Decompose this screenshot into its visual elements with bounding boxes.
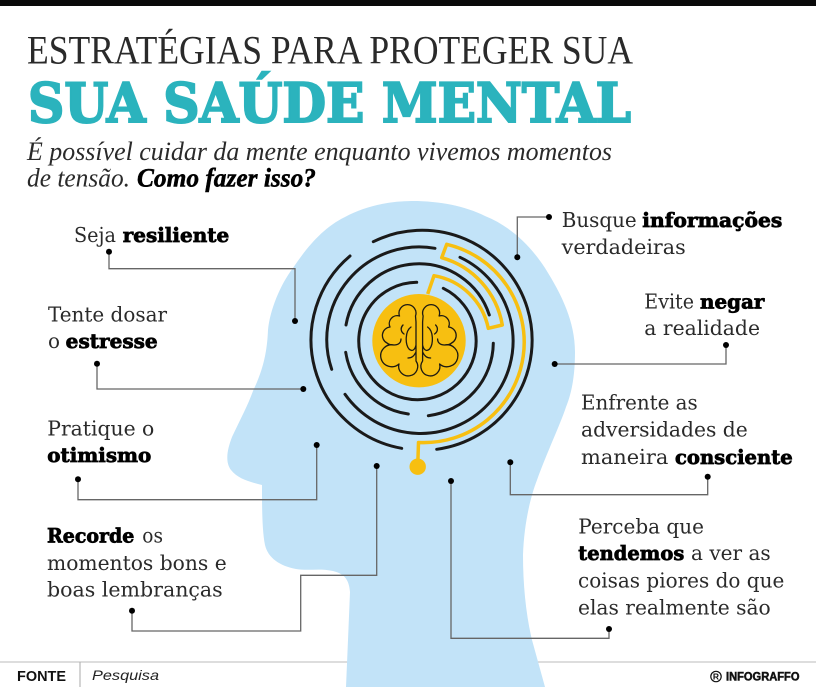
logo: Infograffo: INFOGRAFFO bbox=[726, 672, 800, 684]
leader: Evite negar bbox=[552, 342, 729, 367]
title: SUA SAÚDE MENTAL bbox=[28, 71, 631, 135]
label: Seja resiliente: resiliente bbox=[123, 223, 229, 247]
yellow maze path bbox=[410, 244, 524, 475]
label: Seja resiliente: Seja bbox=[74, 223, 116, 247]
title bbox=[27, 28, 633, 135]
label: Perceba que tendemos bbox=[578, 514, 784, 619]
label: Evite negar: a realidade bbox=[644, 316, 760, 340]
maze rings bbox=[311, 230, 532, 449]
label: Tente dosar o estresse: o bbox=[48, 329, 60, 353]
source: FONTE bbox=[17, 669, 66, 685]
leader: Tente dosar bbox=[94, 361, 306, 392]
head silhouette bbox=[227, 201, 575, 687]
label: Tente dosar o estresse bbox=[48, 303, 167, 353]
leader: Seja resiliente bbox=[106, 249, 298, 324]
leader: Busque informações bbox=[514, 214, 552, 260]
label: Pratique o otimismo: otimismo bbox=[47, 443, 151, 467]
footer rule bbox=[0, 662, 816, 687]
label: Perceba que tendemos: a ver as bbox=[691, 541, 771, 565]
label: Evite negar bbox=[644, 289, 765, 340]
subtitle: É possível cuidar da mente enquanto vivemos momentos bbox=[26, 137, 612, 166]
source: Pesquisa bbox=[92, 667, 159, 683]
label: Tente dosar o estresse: Tente dosar bbox=[48, 303, 167, 327]
subtitle bbox=[26, 137, 612, 193]
icon: brain in yellow circle bbox=[372, 294, 466, 387]
label: Recorde os momentos: Recorde bbox=[47, 523, 134, 547]
label: Tente dosar o estresse: estresse bbox=[66, 329, 158, 353]
logo: Infograffo: R bbox=[713, 672, 719, 682]
leader: Perceba que tendemos bbox=[448, 478, 612, 638]
label: Recorde os momentos: boas lembranças bbox=[47, 578, 223, 602]
label: Recorde os momentos: os bbox=[142, 523, 163, 547]
label: Perceba que tendemos: coisas piores do que bbox=[578, 568, 784, 592]
label: Enfrente as adversidades: consciente bbox=[675, 445, 793, 469]
label: Enfrente as adversidades: adversidades de bbox=[581, 418, 748, 442]
label: Enfrente as adversidades bbox=[581, 390, 793, 469]
label: Enfrente as adversidades: Enfrente as bbox=[581, 390, 698, 414]
label: Pratique o otimismo: Pratique o bbox=[47, 417, 154, 441]
label: Busque informações bbox=[561, 208, 782, 259]
label: Enfrente as adversidades: maneira bbox=[581, 445, 668, 469]
subtitle: de tensão. bbox=[27, 164, 130, 193]
label: Perceba que tendemos: elas realmente são bbox=[578, 595, 771, 619]
label: Busque informações: informações bbox=[642, 208, 782, 232]
subtitle: Como fazer isso? bbox=[137, 164, 316, 193]
label: Recorde os momentos bbox=[47, 523, 227, 602]
label: Recorde os momentos: momentos bons e bbox=[47, 551, 227, 575]
label: Pratique o otimismo bbox=[47, 417, 154, 467]
label: Perceba que tendemos: tendemos bbox=[578, 541, 684, 565]
label: Busque informações: verdadeiras bbox=[561, 235, 686, 259]
leader: Pratique o otimismo bbox=[75, 442, 320, 500]
title: ESTRATÉGIAS PARA PROTEGER SUA bbox=[27, 28, 633, 72]
leader: Recorde os momentos bbox=[129, 463, 380, 631]
label: Busque informações: Busque bbox=[562, 208, 637, 232]
label: Evite negar: negar bbox=[700, 289, 765, 313]
label: Seja resiliente bbox=[74, 223, 229, 247]
leader: Enfrente as adversidades bbox=[507, 459, 711, 495]
label: Evite negar: Evite bbox=[644, 289, 694, 313]
source bbox=[17, 667, 159, 685]
label: Perceba que tendemos: Perceba que bbox=[578, 514, 704, 538]
